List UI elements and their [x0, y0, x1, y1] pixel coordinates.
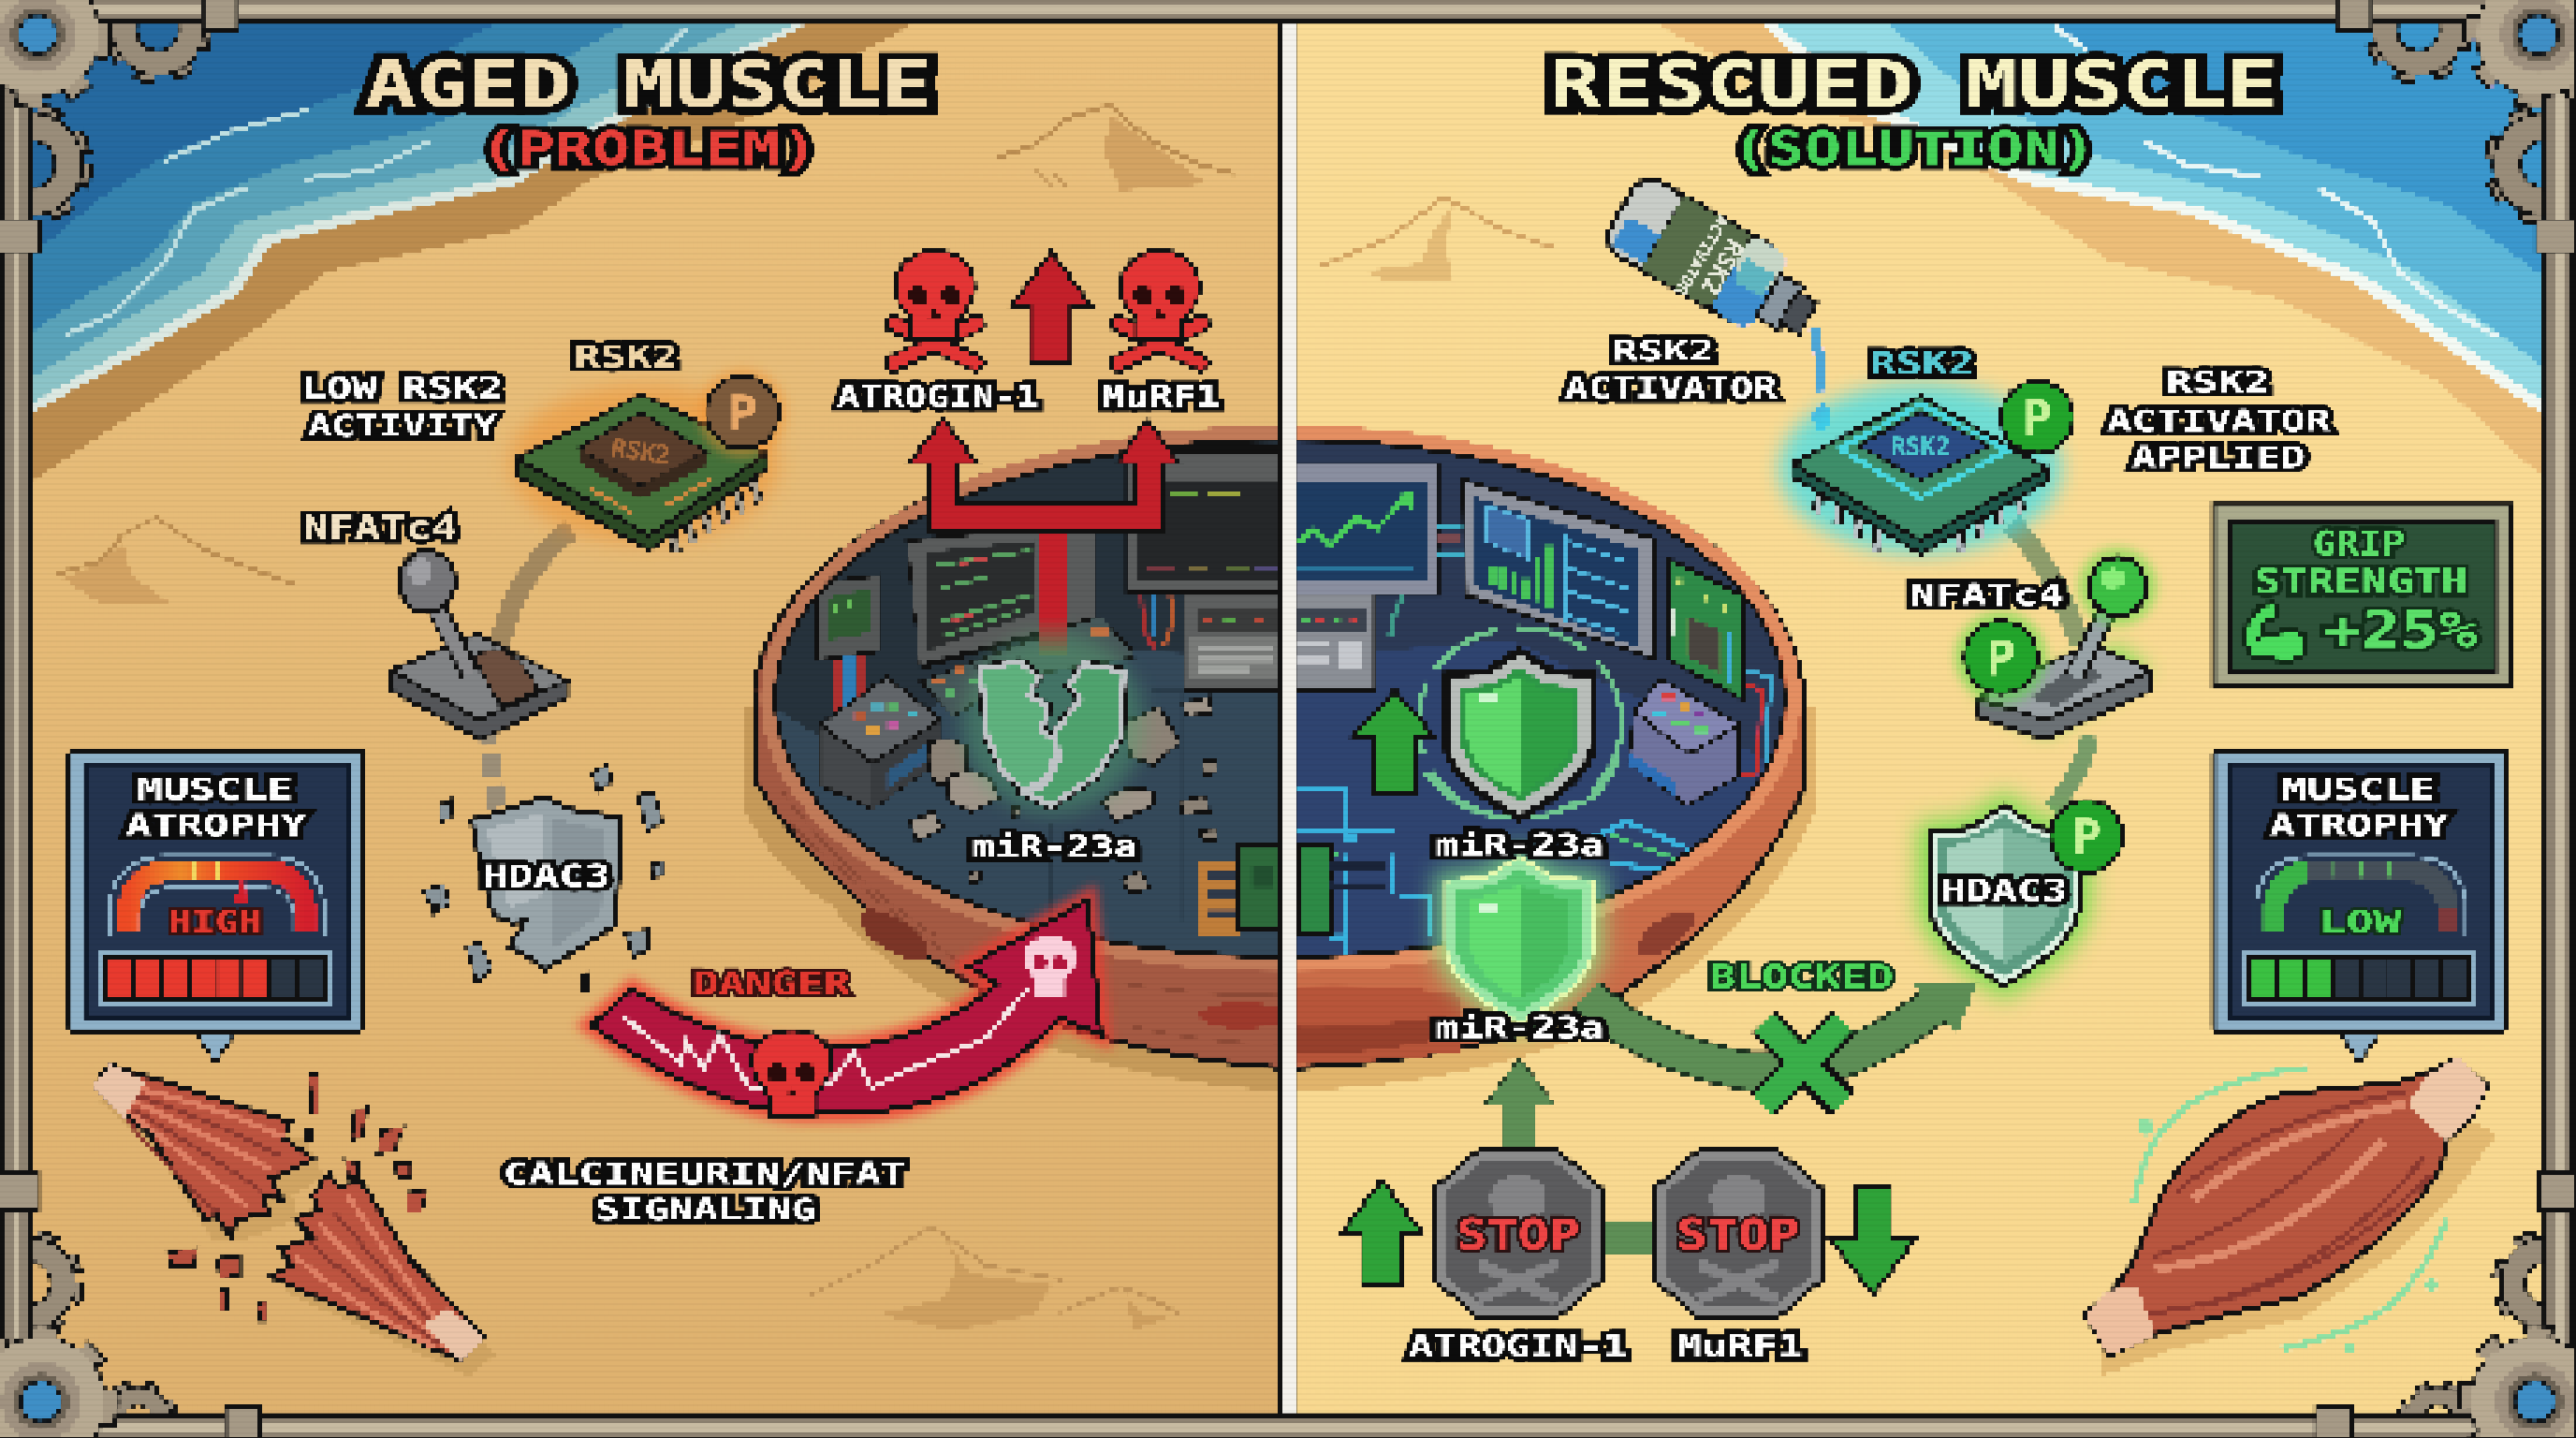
blocked X	[1763, 1022, 1843, 1104]
gear bottom right	[2468, 1335, 2576, 1438]
label: mir lower: miR-23a	[1435, 1011, 1604, 1045]
label: low rsk2: LOW RSK2	[301, 373, 504, 406]
inner rim outline	[812, 440, 1784, 956]
label: rsk2 rescued: RSK2	[1870, 345, 1974, 381]
label: NFATc4 rescued: NFATc4	[1910, 580, 2064, 613]
stop sign murf1	[1654, 1151, 1822, 1318]
bottle label text: RSK2	[1694, 234, 1749, 300]
lever NFATc4 rescued	[1976, 547, 2157, 740]
wall lip	[801, 433, 1794, 964]
label: signaling: SIGNALING	[595, 1194, 815, 1227]
badge letter aged: P	[727, 386, 757, 443]
wall pore	[861, 908, 927, 960]
aged cell cross-section	[744, 417, 1278, 1091]
label: muscle right panel: MUSCLE	[2281, 773, 2436, 807]
label: atrophy left panel: ATROPHY	[125, 809, 306, 843]
panel: grip strength	[2211, 503, 2512, 690]
label: hdac3 aged: HDAC3	[482, 858, 610, 894]
connector: RSK2 to NFATc4 rescued	[2011, 522, 2080, 644]
lower miR-23a shield	[1435, 844, 1604, 1036]
RSK2 chip rescued	[1779, 383, 2062, 553]
dune: rescued side	[1321, 198, 1554, 283]
label: RSK2 aged: RSK2	[574, 341, 678, 374]
muscle torn	[94, 1064, 496, 1377]
cell rim	[792, 429, 1804, 977]
label: mir aged: miR-23a	[972, 830, 1137, 864]
console: right control box	[1628, 679, 1740, 805]
label: murf1 rescued: MuRF1	[1676, 1328, 1803, 1364]
label: atrogin rescued: ATROGIN-1	[1409, 1328, 1627, 1364]
icon: flexed muscle	[2244, 602, 2304, 662]
connector: stop signs	[1603, 1221, 1653, 1254]
gauge: high	[110, 856, 324, 935]
green up arrow	[1354, 690, 1434, 794]
label: muscle left panel: MUSCLE	[138, 773, 293, 807]
up arrow to miR-23a	[1486, 1058, 1554, 1151]
grip value: +25%	[2323, 601, 2478, 660]
icon: skull atrogin aged	[894, 251, 976, 363]
label: rsk2 activator top: RSK2	[1613, 335, 1714, 368]
panel: muscle atrophy low	[2211, 748, 2509, 1064]
connector: RSK2 to NFATc4 aged	[500, 529, 572, 649]
blocked curved arrow	[1587, 981, 1978, 1071]
label: atrogin aged: ATROGIN-1	[837, 380, 1039, 414]
keyboard console	[1184, 594, 1283, 690]
keyboard console	[1295, 594, 1375, 690]
label: activator applied: ACTIVATOR	[2107, 405, 2332, 439]
stop sign atrogin	[1434, 1151, 1602, 1318]
HDAC3 broken shield	[424, 766, 664, 992]
level bar: high	[110, 961, 268, 996]
monitor: bar chart dashboard	[1464, 479, 1654, 659]
title: rescued muscle: RESCUED MUSCLE	[1549, 48, 2278, 123]
label: blocked: BLOCKED	[1709, 959, 1894, 997]
wiring	[1390, 594, 1403, 638]
circuit board wall panel	[1667, 559, 1743, 700]
level bar: low	[2253, 961, 2331, 996]
subtitle: problem: (PROBLEM)	[479, 122, 818, 176]
skull on arrowhead	[1023, 936, 1076, 996]
P badge HDAC3	[2050, 800, 2123, 873]
panel: muscle atrophy high	[67, 748, 365, 1064]
bottle label text: ACTIVATOR	[1670, 212, 1731, 298]
rescued cell cross-section	[792, 427, 1817, 1091]
skull on arrow	[753, 1030, 831, 1116]
monitor: growth chart	[1295, 463, 1438, 594]
P badge lever	[1955, 611, 2047, 703]
swirl of protective energy	[1418, 627, 1621, 818]
wall pore	[1631, 902, 1701, 964]
monitor: small green	[816, 575, 881, 710]
console: left control box	[820, 677, 942, 809]
stop text one: STOP	[1456, 1211, 1580, 1260]
broken miR-23a shield	[981, 662, 1123, 805]
label: rsk2 applied: RSK2	[2166, 367, 2270, 400]
red branching arrow	[909, 419, 1179, 657]
lever NFATc4 aged	[391, 550, 567, 740]
label: applied: APPLIED	[2131, 441, 2305, 475]
dune: top	[997, 105, 1236, 191]
cell rim	[753, 459, 1025, 702]
title: aged muscle: AGED MUSCLE	[365, 48, 933, 123]
background: aged side beach	[0, 0, 1281, 1438]
rocks	[910, 697, 1218, 894]
gear bottom left	[0, 1335, 108, 1438]
icon: green up arrow	[1340, 1180, 1423, 1286]
danger arrow	[592, 901, 1101, 1116]
label: activator: ACTIVATOR	[1565, 373, 1778, 406]
label: hdac3 rescued: HDAC3	[1941, 873, 2068, 909]
connector: NFATc4 to HDAC3 rescued	[2052, 736, 2089, 809]
icon: green down arrow	[1830, 1186, 1915, 1295]
wall fibres	[781, 788, 1281, 1045]
bottle label text	[1670, 212, 1756, 313]
stop text two: STOP	[1676, 1211, 1800, 1260]
badge letter lever: P	[1986, 630, 2016, 687]
connector: NFATc4 to HDAC3 aged	[487, 723, 498, 814]
activator bottle	[1600, 171, 1830, 354]
HDAC3 rescued shield	[1918, 791, 2091, 1000]
label: danger: DANGER	[693, 965, 851, 1004]
inner rim outline	[775, 440, 1781, 956]
label: activity: ACTIVITY	[308, 410, 497, 444]
circuit traces	[1298, 788, 1708, 956]
background: rescued side beach	[1295, 0, 2576, 1438]
wall outline	[754, 690, 1281, 1068]
gear top left	[0, 0, 101, 97]
subtitle: solution: (SOLUTION)	[1732, 122, 2097, 176]
label: NFATc4 aged: NFATc4	[303, 509, 458, 548]
grip text: GRIP	[2313, 523, 2405, 564]
dune: bottom	[809, 1225, 1178, 1331]
label: calcineurin nfat: CALCINEURIN/NFAT	[504, 1158, 906, 1192]
cable connectors	[1438, 522, 1464, 555]
icon: skull murf1 aged	[1119, 251, 1201, 363]
green glow around broken shield	[962, 633, 1144, 814]
activator stream	[1813, 329, 1831, 431]
green board	[1298, 844, 1386, 933]
wall outline	[1295, 677, 1804, 1068]
cell interior	[772, 427, 1283, 970]
label: murf1 aged: MuRF1	[1102, 380, 1220, 414]
badge letter rescued: P	[2022, 390, 2052, 448]
RSK2 chip aged	[509, 385, 779, 552]
label: high: HIGH	[168, 903, 262, 940]
cell shadow on sand	[1295, 707, 1817, 1091]
P badge dim	[698, 368, 787, 457]
circuit board floor	[1199, 844, 1281, 935]
center divider	[1278, 0, 1298, 1438]
badge letter hdac3: P	[2071, 810, 2101, 867]
console: rear panel	[920, 616, 1134, 716]
muscle healthy	[2085, 1058, 2497, 1377]
icon: up arrow aged	[1012, 252, 1090, 361]
label: low: LOW	[2319, 903, 2402, 940]
chip text aged: RSK2	[609, 434, 672, 471]
cell shadow on sand	[742, 707, 1281, 1091]
gauge: low	[2256, 856, 2466, 935]
upper miR-23a shield	[1445, 651, 1593, 818]
gear top right	[2475, 0, 2576, 97]
monitor: code screen	[905, 522, 1097, 670]
label: mir upper: miR-23a	[1435, 829, 1604, 863]
cables	[1741, 670, 1771, 775]
monitor: top right	[1125, 446, 1281, 594]
cables	[1142, 594, 1172, 648]
P badge green	[2001, 381, 2073, 453]
cell interior	[1295, 427, 1804, 970]
label: atrophy right panel: ATROPHY	[2270, 809, 2449, 843]
dune: lower left	[57, 518, 296, 605]
cell wall	[755, 690, 1281, 1068]
wall lip	[758, 426, 1278, 974]
strength text: STRENGTH	[2254, 562, 2467, 602]
cell wall	[1295, 677, 1804, 1068]
chip text rescued: RSK2	[1891, 433, 1950, 462]
